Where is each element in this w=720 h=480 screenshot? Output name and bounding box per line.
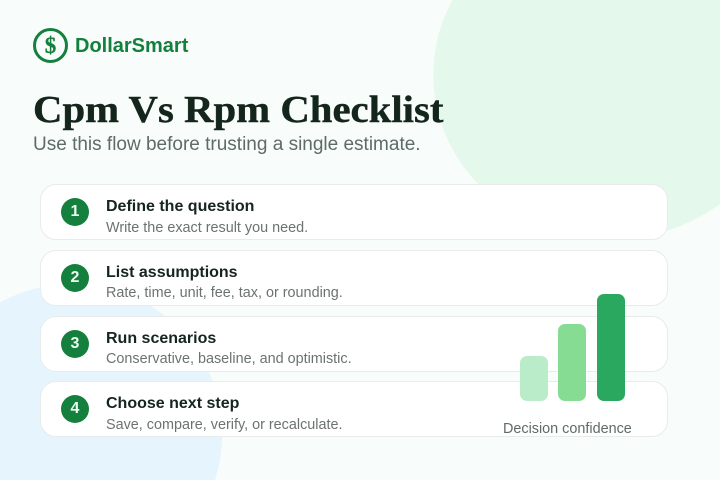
panel: step 3 [40, 316, 668, 372]
subtitle: Use this flow before trusting a single estimate. [33, 134, 421, 155]
bar chart: decision confidence [503, 294, 632, 437]
step number 3 [61, 330, 89, 358]
bar: high [597, 294, 625, 401]
panel: step 2 [40, 250, 668, 306]
bar: low [520, 356, 548, 401]
step number 1: 1 [71, 203, 79, 220]
logo [33, 28, 188, 63]
step number 4 [61, 395, 89, 423]
step number 3: 3 [71, 335, 79, 352]
step heading 3: Run scenarios [106, 330, 216, 347]
step number 2 [61, 264, 89, 292]
step description 3: Conservative, baseline, and optimistic. [106, 351, 352, 367]
panel: step 1 [40, 184, 668, 240]
panel: step 4 [40, 381, 668, 437]
icon: dollar badge: $ [45, 33, 56, 58]
step description 1: Write the exact result you need. [106, 220, 308, 236]
step description 2: Rate, time, unit, fee, tax, or rounding. [106, 285, 343, 301]
title: Cpm Vs Rpm Checklist [33, 89, 443, 131]
step number 1 [61, 198, 89, 226]
step heading 1: Define the question [106, 198, 254, 215]
icon: dollar badge [33, 28, 68, 63]
chart caption: Decision confidence [503, 421, 632, 437]
step number 4: 4 [71, 400, 79, 417]
step number 2: 2 [71, 269, 79, 286]
step description 4: Save, compare, verify, or recalculate. [106, 417, 342, 433]
brand name: DollarSmart [75, 35, 188, 57]
bar: medium [558, 324, 586, 401]
step heading 4: Choose next step [106, 395, 239, 412]
step heading 2: List assumptions [106, 264, 238, 281]
